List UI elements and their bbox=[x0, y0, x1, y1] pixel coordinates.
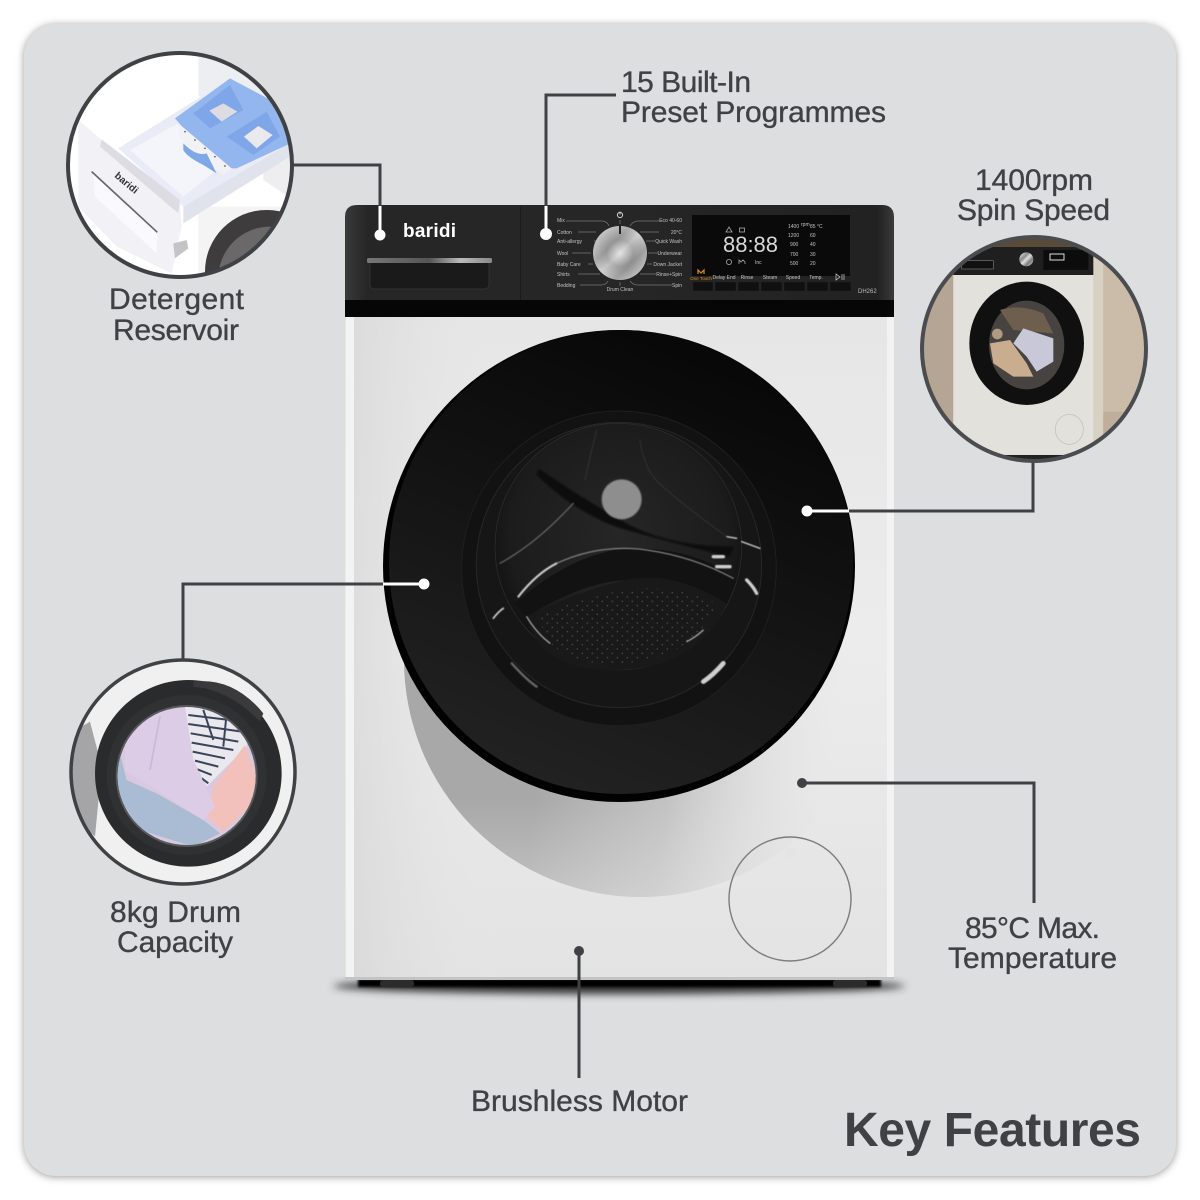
display: 85 °C bbox=[810, 224, 823, 230]
model number: DH262 bbox=[858, 289, 877, 295]
function buttons: Temp. bbox=[809, 275, 823, 281]
callout lines bbox=[183, 95, 1034, 1078]
label: 15 built-in preset programmes bbox=[621, 66, 886, 129]
control panel: Drum Clean bbox=[607, 287, 634, 293]
programme labels right: Down Jacket bbox=[653, 262, 683, 268]
display bbox=[692, 215, 850, 276]
floor shadow bbox=[333, 978, 905, 994]
machine body bbox=[345, 310, 894, 980]
label: 8kg drum capacity bbox=[110, 896, 241, 959]
label: 85C max temperature: Temperature bbox=[948, 942, 1117, 975]
programme labels right bbox=[653, 218, 683, 289]
display: 1400 bbox=[788, 224, 799, 230]
detergent leader bbox=[292, 165, 386, 240]
programme labels left: Cotton bbox=[557, 230, 572, 236]
reflected light spot bbox=[602, 479, 642, 519]
power icon bbox=[617, 212, 623, 218]
door seal bbox=[205, 210, 280, 272]
photo: detergent drawer bbox=[66, 51, 294, 279]
display: 30 bbox=[810, 252, 816, 258]
door glass bbox=[462, 411, 776, 726]
display: 500 bbox=[790, 261, 799, 267]
label: 15 built-in preset programmes: 15 Built-In bbox=[621, 66, 751, 99]
blue cloth bbox=[118, 756, 220, 845]
display: 60 bbox=[810, 233, 816, 239]
label: 85C max temperature: 85°C Max. bbox=[965, 912, 1100, 945]
display: 20 bbox=[810, 261, 816, 267]
programme labels right: Quick Wash bbox=[655, 239, 682, 245]
display: rpm bbox=[801, 222, 810, 228]
display: 900 bbox=[790, 242, 799, 248]
programme labels left: Shirts bbox=[557, 272, 570, 278]
programme labels right: Spin bbox=[672, 283, 682, 289]
function buttons: Steam bbox=[763, 275, 777, 281]
door cast shadow bbox=[404, 423, 878, 897]
drum baffle band bbox=[537, 468, 733, 557]
temperature leader bbox=[797, 778, 1034, 903]
glass highlights bbox=[493, 430, 760, 687]
label: 1400rpm spin speed: 1400rpm bbox=[975, 164, 1093, 197]
programme labels left: Bedding bbox=[557, 283, 576, 289]
programme labels left: Baby Care bbox=[557, 262, 581, 268]
display: 700 bbox=[790, 252, 799, 258]
programmes leader bbox=[540, 95, 616, 240]
display: 40 bbox=[810, 242, 816, 248]
function buttons: Rinse bbox=[741, 275, 754, 281]
pink cloth bbox=[207, 745, 257, 832]
label: 8kg drum capacity: Capacity bbox=[117, 926, 233, 959]
spin speed leader bbox=[802, 462, 1033, 516]
drawer front bbox=[78, 120, 182, 273]
label: 85C max temperature bbox=[948, 912, 1117, 975]
programme label leader lines bbox=[566, 220, 672, 286]
display: 1200 bbox=[788, 233, 799, 239]
label: 15 built-in preset programmes: Preset Programmes bbox=[621, 96, 886, 129]
door ring bbox=[383, 330, 855, 802]
label: brushless motor: Brushless Motor bbox=[471, 1085, 688, 1118]
drum capacity leader bbox=[183, 578, 430, 660]
title: Key Features bbox=[844, 1104, 1141, 1157]
blue softener insert bbox=[175, 78, 291, 168]
photo: machine in a laundry nook bbox=[917, 230, 1153, 465]
selector knob bbox=[593, 226, 647, 280]
programme labels left: Anti-allergy bbox=[557, 239, 583, 245]
programme labels right: Underwear bbox=[658, 251, 682, 257]
label: 1400rpm spin speed: Spin Speed bbox=[957, 194, 1110, 227]
programme labels right: Eco 40-60 bbox=[659, 218, 682, 224]
brand logo: baridi bbox=[403, 221, 456, 242]
photo: laundry in the drum bbox=[70, 660, 295, 884]
programme labels left: Wool bbox=[557, 251, 568, 257]
label: detergent reservoir bbox=[109, 283, 245, 347]
round service hatch bbox=[729, 837, 851, 961]
photo: detergent drawer: baridi bbox=[112, 171, 140, 197]
function buttons: Delay End bbox=[712, 275, 736, 281]
perforations bbox=[540, 588, 717, 664]
label: 1400rpm spin speed bbox=[957, 164, 1110, 227]
function buttons: One Touch bbox=[690, 276, 712, 281]
programme labels left: Mix bbox=[557, 218, 565, 224]
striped cloth bbox=[185, 707, 247, 787]
function buttons bbox=[690, 270, 851, 291]
programme labels right: 20°C bbox=[671, 230, 682, 236]
washing machine bbox=[333, 205, 905, 994]
label: detergent reservoir: Reservoir bbox=[113, 314, 239, 347]
control panel bbox=[345, 205, 894, 317]
motor leader bbox=[574, 946, 584, 1078]
display: Inc bbox=[755, 260, 762, 266]
programme labels right: Rinse+Spin bbox=[656, 272, 682, 278]
function buttons: Speed bbox=[786, 275, 800, 281]
label: 8kg drum capacity: 8kg Drum bbox=[110, 896, 241, 929]
drum bottom bbox=[515, 548, 737, 617]
display: 88:88 bbox=[723, 232, 778, 257]
lilac cloth bbox=[125, 708, 215, 820]
programme labels left bbox=[557, 218, 583, 289]
label: detergent reservoir: Detergent bbox=[109, 283, 245, 316]
detergent drawer handle bbox=[367, 258, 492, 289]
